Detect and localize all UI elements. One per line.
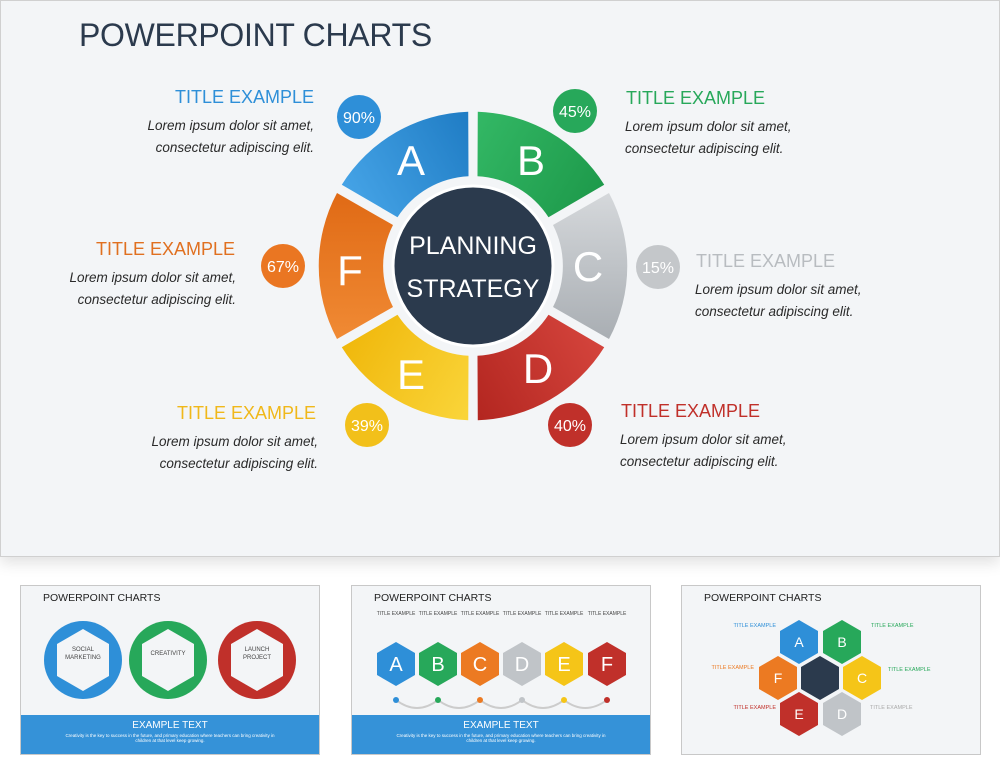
main slide: Lorem ipsum dolor sit amet, [620,432,787,447]
thumbnail 1: children at that level keep growing. [135,738,205,743]
letters: F [337,247,363,294]
text block C [695,251,862,319]
thumbnail 2: children at that level keep growing. [466,738,536,743]
thumbnail 2 [351,585,651,755]
main slide: TITLE EXAMPLE [626,88,765,108]
letters: E [397,351,425,398]
thumbnail 3: D [837,706,847,722]
center text: PLANNING [409,232,537,260]
thumbnail 3: TITLE EXAMPLE [712,665,754,671]
segment B [450,96,613,233]
thumbnail 2: A [389,654,403,676]
text block A [147,87,314,155]
thumbnail 2: B [431,654,445,676]
main slide: Lorem ipsum dolor sit amet, [69,270,236,285]
thumbnail 2: D [515,654,529,676]
main slide: consectetur adipiscing elit. [620,454,778,468]
thumbnail 2: TITLE EXAMPLE [461,611,500,617]
main slide: consectetur adipiscing elit. [160,456,318,470]
thumbnail 2: E [557,654,571,676]
main slide: TITLE EXAMPLE [96,239,235,259]
thumbnail 2: C [473,654,487,676]
text block D [620,401,787,469]
letters: D [523,345,553,392]
thumbnail 3 [681,585,981,755]
thumbnail 2: POWERPOINT CHARTS [374,592,491,604]
thumbnail 3: B [837,634,847,650]
thumbnail 2: TITLE EXAMPLE [377,611,416,617]
thumbnail 2: TITLE EXAMPLE [545,611,584,617]
center text [407,232,540,303]
segment E [333,299,496,436]
segment F [319,193,393,339]
percent badges [261,89,680,447]
main slide: consectetur adipiscing elit. [625,140,783,156]
thumbnail 2: TITLE EXAMPLE [419,611,458,617]
letters: A [397,137,425,184]
thumbnail 3: TITLE EXAMPLE [871,623,914,629]
main slide: TITLE EXAMPLE [696,251,835,271]
main slide: TITLE EXAMPLE [175,87,314,107]
main slide: Lorem ipsum dolor sit amet, [625,119,792,134]
main slide: consectetur adipiscing elit. [156,140,314,154]
thumbnail 1: EXAMPLE TEXT [132,720,208,731]
letters [337,137,603,398]
thumbnail 1: PROJECT [243,655,271,661]
segment D [450,299,613,436]
main slide: Lorem ipsum dolor sit amet, [695,282,862,297]
letters: B [517,137,545,184]
main slide: TITLE EXAMPLE [177,403,316,423]
thumbnail 3: C [857,670,867,686]
main slide: consectetur adipiscing elit. [78,292,236,306]
thumbnail 3: TITLE EXAMPLE [734,623,776,629]
thumbnail 2: EXAMPLE TEXT [463,720,539,731]
thumbnail 2: TITLE EXAMPLE [503,611,542,617]
title: POWERPOINT CHARTS [79,17,432,53]
thumbnail 3: TITLE EXAMPLE [870,705,913,711]
main slide [0,0,1000,557]
thumbnail 1 [20,585,320,755]
main slide: Lorem ipsum dolor sit amet, [151,434,318,449]
text block F [69,239,236,307]
thumbnail 1: MARKETING [65,655,101,661]
thumbnail 2: TITLE EXAMPLE [588,611,627,617]
center text: STRATEGY [407,275,540,303]
percent badges: 90% [343,110,375,127]
thumbnail 1: LAUNCH [245,647,269,653]
main slide: Lorem ipsum dolor sit amet, [147,118,314,133]
thumbnail 3: E [794,706,804,722]
main slide: consectetur adipiscing elit. [695,304,853,318]
thumbnail 1: POWERPOINT CHARTS [43,592,160,604]
thumbnail 2: Creativity is the key to success in the future, and primary education where teachers can bring creativity in [396,733,606,738]
main slide: TITLE EXAMPLE [621,401,760,421]
text block E [151,403,318,471]
percent badges: 39% [351,418,383,435]
thumbnail 1: CREATIVITY [151,651,185,657]
thumbnail 3: POWERPOINT CHARTS [704,592,821,604]
thumbnail 3: TITLE EXAMPLE [734,705,776,711]
segment C [553,193,627,339]
thumbnail 1: Creativity is the key to success in the future, and primary education where teachers can bring creativity in [65,733,275,738]
percent badges: 67% [267,259,299,276]
thumbnail 3: F [774,670,782,686]
thumbnail 3: A [794,634,804,650]
thumbnail 1: SOCIAL [72,647,95,653]
ring chart [261,89,680,447]
segment A [333,96,496,233]
text block B [625,88,792,156]
percent badges: 45% [559,104,591,121]
percent badges: 15% [642,260,674,277]
center circle [393,186,553,346]
thumbnail 2: F [601,654,613,676]
percent badges: 40% [554,418,586,435]
letters: C [573,243,603,290]
thumbnail 3: TITLE EXAMPLE [888,667,931,673]
